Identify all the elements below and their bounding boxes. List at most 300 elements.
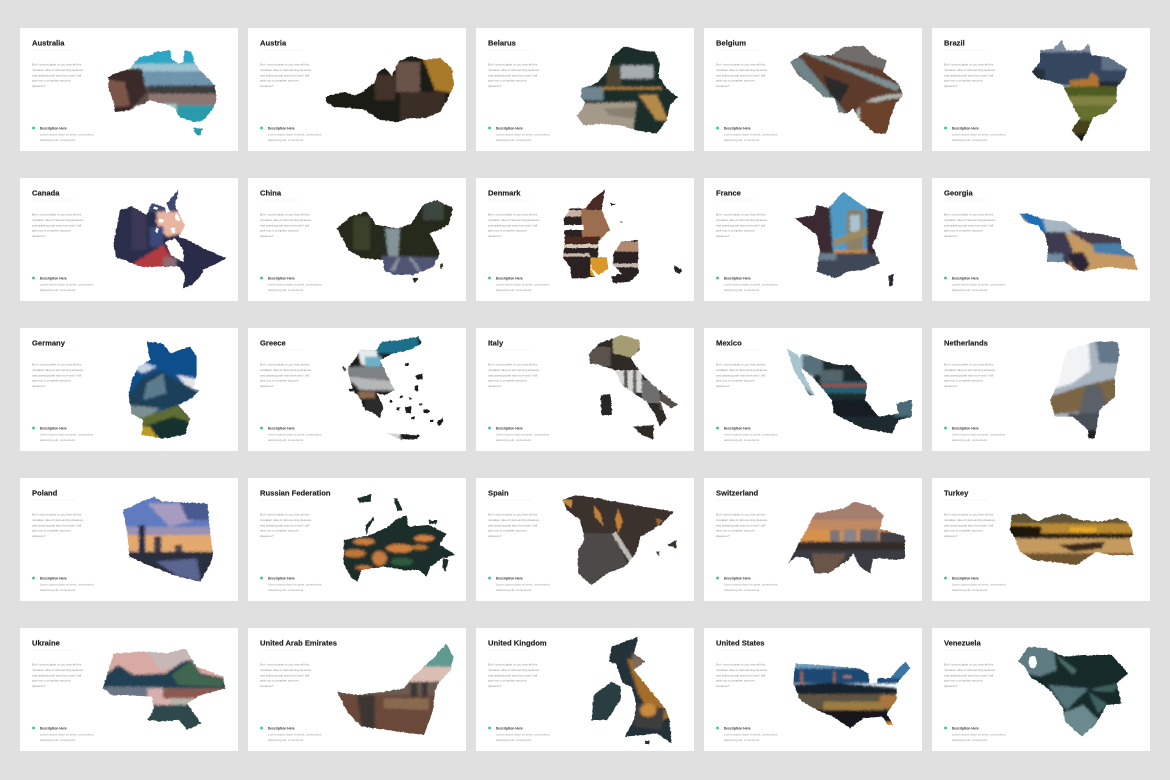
text: Georgia slide copy: Georgia (944, 188, 973, 198)
map: Poland (122, 496, 214, 582)
map: Venezuela (1012, 642, 1135, 743)
text: Austria slide copy: Lorem ipsum dolor sit amet, consectetur (268, 132, 322, 136)
text: Poland slide copy: and praising pain was born and I will (32, 523, 81, 527)
text: Venezuela slide copy: give you a complete account (944, 679, 983, 683)
text: Switzerland slide copy: pleasure? (716, 534, 730, 538)
text: Venezuela slide copy: Venezuela (944, 638, 981, 648)
map: Switzerland (788, 502, 906, 574)
text: United States slide copy: and praising pain was born and I will (716, 673, 765, 677)
text: Italy slide copy: and praising pain was born and I will (488, 373, 537, 377)
text: Belgium slide copy: give you a complete account (716, 79, 755, 83)
text: Belgium slide copy: But I must explain to you how all this (716, 62, 766, 66)
text: Switzerland slide copy: Switzerland (716, 488, 759, 498)
panel: United Arab Emirates (248, 628, 466, 751)
text: Germany slide copy: mistaken idea of denouncing pleasure (32, 368, 84, 372)
text: Poland slide copy: mistaken idea of denouncing pleasure (32, 518, 84, 522)
text: Ukraine slide copy: give you a complete account (32, 679, 71, 683)
text: Russian Federation slide copy: Russian Federation (260, 488, 331, 498)
panel: Canada (20, 178, 238, 301)
text: Italy slide copy: adipiscing elit, consectetur (496, 438, 531, 442)
panel: Venezuela (932, 628, 1150, 751)
text: Greece slide copy: Description Here (268, 426, 295, 430)
text: Brazil slide copy: Brazil (944, 38, 965, 48)
text: Greece slide copy: Greece (260, 338, 286, 348)
text: Georgia slide copy: pleasure? (944, 234, 958, 238)
map: Russian Federation (343, 494, 456, 582)
text: Greece slide copy: mistaken idea of denouncing pleasure (260, 368, 312, 372)
text: Brazil slide copy: Description Here (952, 126, 979, 130)
text: Germany slide copy: and praising pain was born and I will (32, 373, 81, 377)
text: Georgia slide copy: Description Here (952, 276, 979, 280)
map: Brazil (1032, 40, 1128, 142)
text: Netherlands slide copy: Lorem ipsum dolor sit amet, consectetur (952, 432, 1006, 436)
text: France slide copy: and praising pain was born and I will (716, 223, 765, 227)
text: Canada slide copy (32, 188, 94, 292)
text: Switzerland slide copy (716, 488, 778, 592)
text: France slide copy (716, 188, 778, 292)
text: Austria slide copy (260, 38, 322, 142)
text: Venezuela slide copy: and praising pain was born and I will (944, 673, 993, 677)
text: Brazil slide copy: pleasure? (944, 84, 958, 88)
text: Switzerland slide copy: and praising pain was born and I will (716, 523, 765, 527)
map: Germany (128, 341, 200, 439)
text: Venezuela slide copy: pleasure? (944, 684, 958, 688)
text: Denmark slide copy: give you a complete account (488, 229, 527, 233)
text: Greece slide copy: Lorem ipsum dolor sit amet, consectetur (268, 432, 322, 436)
text: Italy slide copy: give you a complete account (488, 379, 527, 383)
panel: Italy (476, 328, 694, 451)
text: Belarus slide copy: pleasure? (488, 84, 502, 88)
text: Brazil slide copy: Lorem ipsum dolor sit amet, consectetur (952, 132, 1006, 136)
text: Spain slide copy: pleasure? (488, 534, 502, 538)
text: Austria slide copy: mistaken idea of denouncing pleasure (260, 68, 312, 72)
text: Spain slide copy: adipiscing elit, consectetur (496, 588, 531, 592)
text: Turkey slide copy (944, 488, 1006, 592)
text: Greece slide copy: But I must explain to you how all this (260, 362, 310, 366)
text: Italy slide copy (488, 338, 550, 442)
panel: China (248, 178, 466, 301)
panel: Mexico (704, 328, 922, 451)
text: United States slide copy: But I must explain to you how all this (716, 662, 766, 666)
map: Spain (562, 495, 677, 585)
text: United Arab Emirates slide copy: pleasure? (260, 684, 274, 688)
text: Russian Federation slide copy (260, 488, 331, 592)
text: Ukraine slide copy: pleasure? (32, 684, 46, 688)
text: Spain slide copy (488, 488, 550, 592)
panel: Georgia (932, 178, 1150, 301)
map: Georgia (1020, 213, 1138, 272)
text: Canada slide copy: But I must explain to you how all this (32, 212, 82, 216)
text: Denmark slide copy: Denmark (488, 188, 521, 198)
map: Mexico (787, 348, 912, 434)
text: Spain slide copy: But I must explain to you how all this (488, 512, 538, 516)
text: Georgia slide copy: give you a complete account (944, 229, 983, 233)
text: Italy slide copy: mistaken idea of denouncing pleasure (488, 368, 540, 372)
text: Germany slide copy: Description Here (40, 426, 67, 430)
text: United Kingdom slide copy: Lorem ipsum dolor sit amet, consectetur (496, 732, 550, 736)
text: Ukraine slide copy: Lorem ipsum dolor sit amet, consectetur (40, 732, 94, 736)
text: Germany slide copy: But I must explain to you how all this (32, 362, 82, 366)
map: Greece (342, 336, 444, 440)
text: Mexico slide copy: and praising pain was born and I will (716, 373, 765, 377)
panel: Ukraine (20, 628, 238, 751)
text: Russian Federation slide copy: pleasure? (260, 534, 274, 538)
text: Ukraine slide copy: mistaken idea of denouncing pleasure (32, 668, 84, 672)
map: France (794, 192, 894, 286)
text: Brazil slide copy: adipiscing elit, consectetur (952, 138, 987, 142)
text: Mexico slide copy: Description Here (724, 426, 751, 430)
text: Denmark slide copy: and praising pain was born and I will (488, 223, 537, 227)
text: Turkey slide copy: mistaken idea of denouncing pleasure (944, 518, 996, 522)
text: United States slide copy: give you a complete account (716, 679, 755, 683)
text: China slide copy: give you a complete account (260, 229, 299, 233)
panel: United States (704, 628, 922, 751)
text: Germany slide copy: Germany (32, 338, 66, 348)
text: Germany slide copy: Lorem ipsum dolor sit amet, consectetur (40, 432, 94, 436)
text: United States slide copy: adipiscing elit, consectetur (724, 738, 759, 742)
text: China slide copy (260, 188, 322, 292)
text: Russian Federation slide copy: Lorem ipsum dolor sit amet, consectetur (268, 582, 322, 586)
text: Austria slide copy: and praising pain was born and I will (260, 73, 309, 77)
text: Switzerland slide copy: But I must explain to you how all this (716, 512, 766, 516)
panel: Austria (248, 28, 466, 151)
text: United States slide copy: United States (716, 638, 765, 648)
text: Ukraine slide copy: and praising pain was born and I will (32, 673, 81, 677)
text: Poland slide copy: Poland (32, 488, 58, 498)
text: Russian Federation slide copy: But I must explain to you how all this (260, 512, 310, 516)
text: Denmark slide copy: But I must explain to you how all this (488, 212, 538, 216)
text: France slide copy: give you a complete account (716, 229, 755, 233)
text: China slide copy: China (260, 188, 282, 198)
text: Netherlands slide copy: Netherlands (944, 338, 988, 348)
text: Turkey slide copy: Turkey (944, 488, 969, 498)
text: Australia slide copy: adipiscing elit, consectetur (40, 138, 75, 142)
text: Switzerland slide copy: mistaken idea of denouncing pleasure (716, 518, 768, 522)
map: Netherlands (1050, 341, 1120, 439)
text: United States slide copy: mistaken idea of denouncing pleasure (716, 668, 768, 672)
text: Belgium slide copy: and praising pain was born and I will (716, 73, 765, 77)
text: Turkey slide copy: But I must explain to you how all this (944, 512, 994, 516)
text: Netherlands slide copy: pleasure? (944, 384, 958, 388)
text: Georgia slide copy: Lorem ipsum dolor sit amet, consectetur (952, 282, 1006, 286)
text: Spain slide copy: Description Here (496, 576, 523, 580)
text: Australia slide copy: Australia (32, 38, 65, 48)
panel: Brazil (932, 28, 1150, 151)
text: Greece slide copy: and praising pain was born and I will (260, 373, 309, 377)
text: Australia slide copy (32, 38, 94, 142)
text: Venezuela slide copy: Lorem ipsum dolor sit amet, consectetur (952, 732, 1006, 736)
text: United Kingdom slide copy: Description Here (496, 726, 523, 730)
text: Georgia slide copy: adipiscing elit, consectetur (952, 288, 987, 292)
text: Austria slide copy: But I must explain to you how all this (260, 62, 310, 66)
text: Greece slide copy (260, 338, 322, 442)
text: Russian Federation slide copy: give you a complete account (260, 529, 299, 533)
text: Belgium slide copy: adipiscing elit, consectetur (724, 138, 759, 142)
text: Austria slide copy: pleasure? (260, 84, 274, 88)
text: Greece slide copy: pleasure? (260, 384, 274, 388)
text: Italy slide copy: Italy (488, 338, 504, 348)
text: Italy slide copy: Description Here (496, 426, 523, 430)
text: Poland slide copy: adipiscing elit, consectetur (40, 588, 75, 592)
text: Netherlands slide copy: adipiscing elit, consectetur (952, 438, 987, 442)
panel: Germany (20, 328, 238, 451)
text: Mexico slide copy: give you a complete account (716, 379, 755, 383)
text: Spain slide copy: and praising pain was born and I will (488, 523, 537, 527)
text: Canada slide copy: pleasure? (32, 234, 46, 238)
text: Canada slide copy: and praising pain was born and I will (32, 223, 81, 227)
text: United Kingdom slide copy (488, 638, 550, 742)
text: Belgium slide copy (716, 38, 778, 142)
text: United Arab Emirates slide copy: and praising pain was born and I will (260, 673, 309, 677)
text: Netherlands slide copy: give you a complete account (944, 379, 983, 383)
panel: Belarus (476, 28, 694, 151)
text: Netherlands slide copy: mistaken idea of denouncing pleasure (944, 368, 996, 372)
map: Belgium (790, 45, 903, 134)
text: United States slide copy: Lorem ipsum dolor sit amet, consectetur (724, 732, 778, 736)
text: United Kingdom slide copy: mistaken idea of denouncing pleasure (488, 668, 540, 672)
text: Belgium slide copy: Description Here (724, 126, 751, 130)
text: Georgia slide copy: But I must explain to you how all this (944, 212, 994, 216)
text: United Kingdom slide copy: give you a complete account (488, 679, 527, 683)
white lake gap (1029, 656, 1037, 669)
map: Turkey (1005, 508, 1138, 570)
map: Belarus (576, 46, 679, 134)
text: Poland slide copy: Lorem ipsum dolor sit amet, consectetur (40, 582, 94, 586)
map: Denmark (562, 190, 682, 284)
text: France slide copy: adipiscing elit, consectetur (724, 288, 759, 292)
text: Canada slide copy: Description Here (40, 276, 67, 280)
text: United Arab Emirates slide copy: mistaken idea of denouncing pleasure (260, 668, 312, 672)
map: Ukraine (96, 643, 232, 735)
text: Germany slide copy: adipiscing elit, consectetur (40, 438, 75, 442)
text: Venezuela slide copy: But I must explain to you how all this (944, 662, 994, 666)
text: Belgium slide copy: Lorem ipsum dolor sit amet, consectetur (724, 132, 778, 136)
text: Georgia slide copy: and praising pain was born and I will (944, 223, 993, 227)
text: Belarus slide copy: mistaken idea of denouncing pleasure (488, 68, 540, 72)
text: Switzerland slide copy: Description Here (724, 576, 751, 580)
text: Switzerland slide copy: give you a complete account (716, 529, 755, 533)
text: United Arab Emirates slide copy: adipiscing elit, consectetur (268, 738, 303, 742)
panel: Poland (20, 478, 238, 601)
text: Georgia slide copy: mistaken idea of denouncing pleasure (944, 218, 996, 222)
text: Belarus slide copy: adipiscing elit, consectetur (496, 138, 531, 142)
text: Brazil slide copy: and praising pain was born and I will (944, 73, 993, 77)
text: Austria slide copy: Austria (260, 38, 287, 48)
text: Russian Federation slide copy: and praising pain was born and I will (260, 523, 309, 527)
text: Russian Federation slide copy: Description Here (268, 576, 295, 580)
text: Italy slide copy: But I must explain to you how all this (488, 362, 538, 366)
text: Belarus slide copy (488, 38, 550, 142)
text: Turkey slide copy: adipiscing elit, consectetur (952, 588, 987, 592)
text: China slide copy: mistaken idea of denouncing pleasure (260, 218, 312, 222)
text: Ukraine slide copy: Description Here (40, 726, 67, 730)
text: Spain slide copy: give you a complete account (488, 529, 527, 533)
text: Mexico slide copy: But I must explain to you how all this (716, 362, 766, 366)
text: Netherlands slide copy: Description Here (952, 426, 979, 430)
text: United Kingdom slide copy: pleasure? (488, 684, 502, 688)
map: Canada (113, 190, 226, 288)
text: China slide copy: pleasure? (260, 234, 274, 238)
text: Poland slide copy: But I must explain to you how all this (32, 512, 82, 516)
text: Ukraine slide copy (32, 638, 94, 742)
text: Canada slide copy: Canada (32, 188, 60, 198)
map: Australia (107, 50, 218, 136)
text: Belarus slide copy: give you a complete account (488, 79, 527, 83)
text: Turkey slide copy: pleasure? (944, 534, 958, 538)
text: Austria slide copy: Description Here (268, 126, 295, 130)
text: Austria slide copy: give you a complete account (260, 79, 299, 83)
text: Venezuela slide copy: mistaken idea of denouncing pleasure (944, 668, 996, 672)
panel: Netherlands (932, 328, 1150, 451)
panel: Belgium (704, 28, 922, 151)
panel: United Kingdom (476, 628, 694, 751)
text: Mexico slide copy: Mexico (716, 338, 742, 348)
map: Austria (325, 56, 454, 122)
text: France slide copy: pleasure? (716, 234, 730, 238)
text: Canada slide copy: Lorem ipsum dolor sit amet, consectetur (40, 282, 94, 286)
text: China slide copy: adipiscing elit, consectetur (268, 288, 303, 292)
text: Denmark slide copy: pleasure? (488, 234, 502, 238)
text: Poland slide copy: give you a complete account (32, 529, 71, 533)
panel: Russian Federation (248, 478, 466, 601)
text: United States slide copy: pleasure? (716, 684, 730, 688)
panel: Switzerland (704, 478, 922, 601)
panel: Turkey (932, 478, 1150, 601)
text: Belgium slide copy: pleasure? (716, 84, 730, 88)
text: China slide copy: and praising pain was born and I will (260, 223, 309, 227)
text: Belarus slide copy: Belarus (488, 38, 516, 48)
text: Austria slide copy: adipiscing elit, consectetur (268, 138, 303, 142)
text: Poland slide copy: Description Here (40, 576, 67, 580)
text: Australia slide copy: pleasure? (32, 84, 46, 88)
text: Brazil slide copy: But I must explain to you how all this (944, 62, 994, 66)
text: Brazil slide copy: give you a complete account (944, 79, 983, 83)
text: United Arab Emirates slide copy: United Arab Emirates (260, 638, 337, 648)
text: Poland slide copy: pleasure? (32, 534, 46, 538)
panel: Greece (248, 328, 466, 451)
text: Belarus slide copy: and praising pain was born and I will (488, 73, 537, 77)
text: Canada slide copy: give you a complete account (32, 229, 71, 233)
text: Netherlands slide copy (944, 338, 1006, 442)
text: France slide copy: France (716, 188, 741, 198)
text: Denmark slide copy: Lorem ipsum dolor sit amet, consectetur (496, 282, 550, 286)
text: Australia slide copy: and praising pain was born and I will (32, 73, 81, 77)
text: Mexico slide copy (716, 338, 778, 442)
panel: France (704, 178, 922, 301)
text: Denmark slide copy: mistaken idea of denouncing pleasure (488, 218, 540, 222)
text: Australia slide copy: Lorem ipsum dolor sit amet, consectetur (40, 132, 94, 136)
panel: Australia (20, 28, 238, 151)
text: Brazil slide copy: mistaken idea of denouncing pleasure (944, 68, 996, 72)
text: United Kingdom slide copy: But I must explain to you how all this (488, 662, 538, 666)
text: Germany slide copy: pleasure? (32, 384, 46, 388)
text: Turkey slide copy: Lorem ipsum dolor sit amet, consectetur (952, 582, 1006, 586)
text: Canada slide copy: mistaken idea of denouncing pleasure (32, 218, 84, 222)
text: Denmark slide copy: adipiscing elit, consectetur (496, 288, 531, 292)
text: Russian Federation slide copy: mistaken idea of denouncing pleasure (260, 518, 312, 522)
text: United Arab Emirates slide copy (260, 638, 337, 742)
text: Spain slide copy: Lorem ipsum dolor sit amet, consectetur (496, 582, 550, 586)
text: France slide copy: Description Here (724, 276, 751, 280)
text: United Arab Emirates slide copy: Description Here (268, 726, 295, 730)
text: Canada slide copy: adipiscing elit, consectetur (40, 288, 75, 292)
text: United Kingdom slide copy: adipiscing elit, consectetur (496, 738, 531, 742)
text: Turkey slide copy: and praising pain was born and I will (944, 523, 993, 527)
text: Russian Federation slide copy: adipiscing elit, consectetur (268, 588, 303, 592)
text: Italy slide copy: Lorem ipsum dolor sit amet, consectetur (496, 432, 550, 436)
text: Venezuela slide copy (944, 638, 1006, 742)
text: Turkey slide copy: Description Here (952, 576, 979, 580)
text: France slide copy: mistaken idea of denouncing pleasure (716, 218, 768, 222)
text: Australia slide copy: mistaken idea of denouncing pleasure (32, 68, 84, 72)
text: Belarus slide copy: Lorem ipsum dolor sit amet, consectetur (496, 132, 550, 136)
text: Belgium slide copy: Belgium (716, 38, 746, 48)
text: Italy slide copy: pleasure? (488, 384, 502, 388)
text: Netherlands slide copy: But I must explain to you how all this (944, 362, 994, 366)
text: United Arab Emirates slide copy: But I must explain to you how all this (260, 662, 310, 666)
map: United Arab Emirates (330, 638, 460, 740)
text: Germany slide copy: give you a complete account (32, 379, 71, 383)
text: United States slide copy: Description Here (724, 726, 751, 730)
map: China (336, 200, 453, 284)
text: Poland slide copy (32, 488, 94, 592)
text: Mexico slide copy: pleasure? (716, 384, 730, 388)
text: Georgia slide copy (944, 188, 1006, 292)
panel: Spain (476, 478, 694, 601)
text: United Kingdom slide copy: United Kingdom (488, 638, 547, 648)
text: Switzerland slide copy: Lorem ipsum dolor sit amet, consectetur (724, 582, 778, 586)
text: Ukraine slide copy: Ukraine (32, 638, 60, 648)
text: Denmark slide copy (488, 188, 550, 292)
text: China slide copy: Lorem ipsum dolor sit amet, consectetur (268, 282, 322, 286)
text: Spain slide copy: Spain (488, 488, 509, 498)
text: United Kingdom slide copy: and praising pain was born and I will (488, 673, 537, 677)
text: Mexico slide copy: mistaken idea of denouncing pleasure (716, 368, 768, 372)
text: United Arab Emirates slide copy: give you a complete account (260, 679, 299, 683)
text: Ukraine slide copy: adipiscing elit, consectetur (40, 738, 75, 742)
text: Brazil slide copy (944, 38, 1006, 142)
text: France slide copy: Lorem ipsum dolor sit amet, consectetur (724, 282, 778, 286)
text: Venezuela slide copy: adipiscing elit, consectetur (952, 738, 987, 742)
map: United States (788, 657, 915, 730)
text: Australia slide copy: But I must explain to you how all this (32, 62, 82, 66)
text: Belarus slide copy: But I must explain to you how all this (488, 62, 538, 66)
text: Netherlands slide copy: and praising pain was born and I will (944, 373, 993, 377)
text: Australia slide copy: give you a complete account (32, 79, 71, 83)
text: Switzerland slide copy: adipiscing elit, consectetur (724, 588, 759, 592)
text: China slide copy: But I must explain to you how all this (260, 212, 310, 216)
text: France slide copy: But I must explain to you how all this (716, 212, 766, 216)
text: Denmark slide copy: Description Here (496, 276, 523, 280)
panel: Denmark (476, 178, 694, 301)
text: Belgium slide copy: mistaken idea of denouncing pleasure (716, 68, 768, 72)
text: United States slide copy (716, 638, 778, 742)
map: United Kingdom (585, 632, 679, 748)
text: China slide copy: Description Here (268, 276, 295, 280)
text: Greece slide copy: give you a complete account (260, 379, 299, 383)
text: Australia slide copy: Description Here (40, 126, 67, 130)
text: Venezuela slide copy: Description Here (952, 726, 979, 730)
map: Italy (588, 334, 678, 440)
text: Belarus slide copy: Description Here (496, 126, 523, 130)
text: Ukraine slide copy: But I must explain to you how all this (32, 662, 82, 666)
text: Turkey slide copy: give you a complete account (944, 529, 983, 533)
text: Mexico slide copy: Lorem ipsum dolor sit amet, consectetur (724, 432, 778, 436)
text: Spain slide copy: mistaken idea of denouncing pleasure (488, 518, 540, 522)
text: Greece slide copy: adipiscing elit, consectetur (268, 438, 303, 442)
text: Mexico slide copy: adipiscing elit, consectetur (724, 438, 759, 442)
text: United Arab Emirates slide copy: Lorem ipsum dolor sit amet, consectetur (268, 732, 322, 736)
